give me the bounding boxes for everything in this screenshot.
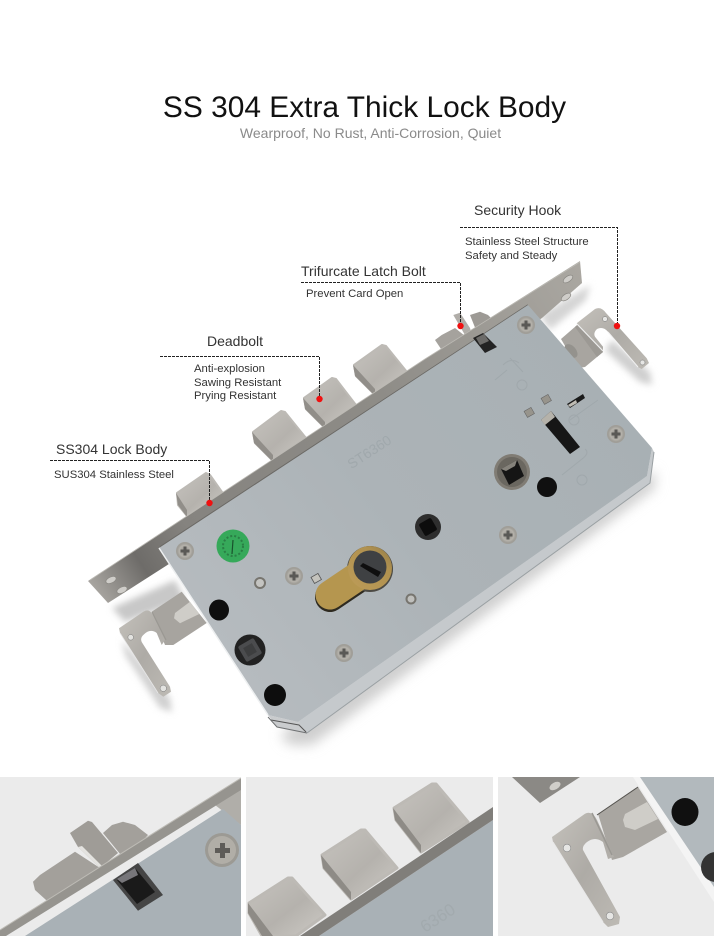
faceplate top edge — [90, 262, 580, 580]
detail photo: hook — [498, 777, 714, 936]
detail photo: deadbolts: 6360 — [417, 900, 459, 936]
green sticker — [216, 530, 250, 562]
latch slot — [473, 333, 497, 353]
lock body product photo — [88, 261, 655, 745]
detail photo: latch bolt — [0, 777, 241, 936]
case side — [268, 448, 654, 733]
callout: ss304 lock body: SUS304 Stainless Steel — [54, 469, 174, 481]
callout: security hook — [460, 202, 620, 329]
callout: deadbolt: Anti-explosion — [194, 363, 265, 375]
callout: security hook: Safety and Steady — [465, 250, 558, 262]
brass cylinder — [330, 546, 393, 597]
callout: security hook: Stainless Steel Structure — [465, 236, 589, 248]
follower hub — [494, 454, 530, 490]
case edge — [160, 305, 528, 547]
callout: ss304 lock body: SS304 Lock Body — [56, 441, 167, 457]
case face — [159, 305, 652, 722]
callout: trifurcate latch bolt — [301, 263, 464, 329]
callout: deadbolt: Prying Resistant — [194, 390, 277, 402]
upper hook — [561, 308, 649, 369]
detail photo: deadbolts — [246, 777, 493, 936]
callout: deadbolt: Deadbolt — [207, 333, 263, 349]
subtitle: Wearproof, No Rust, Anti-Corrosion, Quiet — [240, 125, 501, 141]
embossed marks — [495, 358, 598, 485]
screws — [176, 316, 625, 662]
callout: trifurcate latch bolt: Trifurcate Latch Bolt — [301, 263, 426, 279]
model stamp: ST6360 — [344, 432, 394, 472]
case holes — [209, 477, 557, 706]
deadbolts — [176, 345, 407, 517]
callout: deadbolt: Sawing Resistant — [194, 377, 282, 389]
callout: ss304 lock body — [50, 441, 213, 506]
lower hook — [119, 592, 207, 697]
title: SS 304 Extra Thick Lock Body — [163, 91, 566, 124]
trifurcate latch bolt — [435, 312, 497, 352]
shadows — [112, 285, 655, 745]
callout: trifurcate latch bolt: Prevent Card Open — [306, 288, 403, 300]
window slots — [524, 394, 585, 454]
callout: deadbolt — [160, 333, 323, 402]
callout: security hook: Security Hook — [474, 202, 562, 218]
faceplate screw holes — [105, 274, 574, 595]
faceplate — [88, 261, 582, 603]
